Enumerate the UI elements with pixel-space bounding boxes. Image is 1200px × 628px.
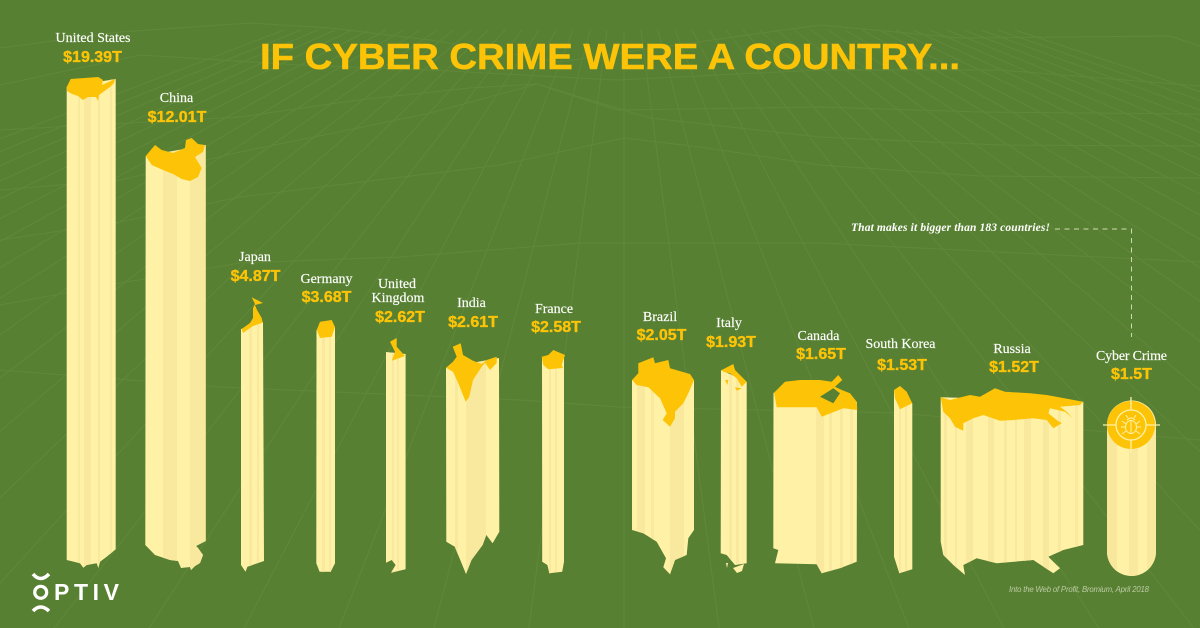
column: United Kingdom: $2.62T bbox=[375, 309, 425, 326]
column: Russia bbox=[936, 342, 1088, 580]
column: France bbox=[531, 302, 581, 578]
column: United Kingdom: United bbox=[378, 277, 416, 292]
column: Japan bbox=[231, 250, 281, 577]
title: IF CYBER CRIME WERE A COUNTRY... bbox=[260, 36, 960, 77]
column: South Korea bbox=[866, 337, 936, 577]
column: Japan: $4.87T bbox=[231, 268, 281, 285]
column: Cyber Crime: $1.5T bbox=[1111, 366, 1152, 383]
column: Canada: Canada bbox=[798, 329, 840, 344]
column: United Kingdom: Kingdom bbox=[372, 291, 425, 306]
column: Brazil: $2.05T bbox=[637, 327, 687, 344]
icon: target with bug bbox=[1103, 397, 1160, 453]
column: Italy: $1.93T bbox=[706, 334, 756, 351]
column: Brazil: Brazil bbox=[643, 310, 677, 325]
column: Italy bbox=[706, 316, 756, 573]
column: France: $2.58T bbox=[531, 319, 581, 336]
column: Cyber Crime bbox=[1096, 349, 1167, 580]
logo: Optiv: PTIV bbox=[54, 579, 120, 605]
column: Germany bbox=[300, 272, 353, 577]
source note: Into the Web of Profit, Bromium, April 2018 bbox=[1009, 585, 1150, 594]
column: South Korea: South Korea bbox=[866, 337, 936, 352]
column: United Kingdom bbox=[372, 277, 425, 577]
column: United States: $19.39T bbox=[63, 49, 122, 66]
column: France: France bbox=[535, 302, 573, 317]
callout: bigger than 183 countries bbox=[851, 222, 1132, 337]
column: India bbox=[446, 297, 500, 574]
column: Cyber Crime: Cyber Crime bbox=[1096, 349, 1167, 364]
column: Russia: $1.52T bbox=[989, 359, 1039, 376]
column: Germany: $3.68T bbox=[302, 289, 352, 306]
column: Germany: Germany bbox=[300, 272, 353, 287]
column: India: $2.61T bbox=[448, 314, 498, 331]
column: Russia: Russia bbox=[993, 342, 1031, 357]
column: China: $12.01T bbox=[148, 109, 207, 126]
column: United States bbox=[56, 31, 130, 580]
column: Brazil bbox=[632, 311, 694, 574]
column: Canada bbox=[770, 329, 860, 577]
column: South Korea: $1.53T bbox=[877, 357, 927, 374]
column: United States: United States bbox=[56, 31, 130, 46]
column: Japan: Japan bbox=[239, 250, 271, 265]
column: China bbox=[145, 92, 206, 570]
column: Canada: $1.65T bbox=[796, 346, 846, 363]
logo: Optiv bbox=[33, 574, 120, 611]
column: India: India bbox=[457, 296, 487, 311]
column: Italy: Italy bbox=[716, 316, 742, 331]
column: China: China bbox=[160, 91, 194, 106]
callout: bigger than 183 countries: That makes it bigger than 183 countries! bbox=[851, 222, 1050, 234]
